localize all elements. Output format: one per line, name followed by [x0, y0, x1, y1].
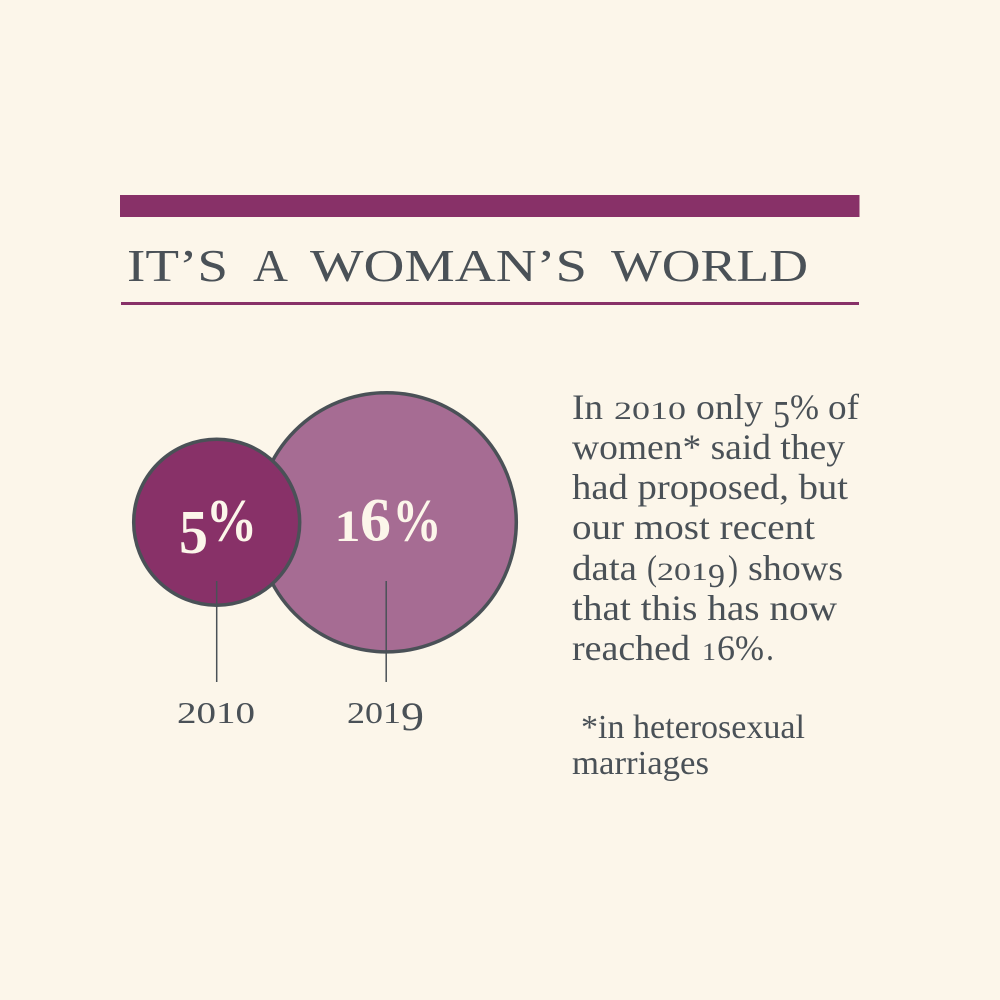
- chart: overlapping circles: [134, 393, 516, 739]
- body text: 9: [708, 558, 725, 595]
- title: IT’S: [127, 240, 228, 291]
- body text: 201: [657, 559, 708, 586]
- label: 2019: 201: [347, 695, 401, 730]
- circle: 2019: 1: [334, 502, 360, 550]
- title: WOMAN’S: [310, 240, 587, 291]
- body text: 6: [717, 628, 735, 668]
- top bar: [120, 195, 860, 217]
- label: 2019: 9: [401, 694, 424, 739]
- body text: 5: [773, 394, 790, 436]
- body text: of: [828, 387, 859, 427]
- label: 2010: 2010: [177, 695, 255, 730]
- body text: In: [572, 387, 603, 427]
- circle: 2019: [257, 393, 516, 682]
- body text: %: [735, 628, 764, 668]
- label: 2019: [347, 694, 424, 739]
- title: A: [253, 240, 288, 291]
- body text: that this has now: [572, 588, 837, 628]
- footnote: [572, 709, 805, 782]
- circle: 2019: 6: [360, 488, 391, 554]
- body text: 2010: [614, 398, 686, 425]
- body text: reached: [572, 628, 690, 668]
- body text: ): [728, 548, 738, 588]
- title underline: [121, 302, 859, 305]
- footnote: marriages: [572, 745, 709, 782]
- footnote: *in heterosexual: [581, 709, 805, 746]
- circle: 2010: [134, 439, 300, 682]
- body text: only: [696, 387, 763, 427]
- circle: 2010: 5: [179, 499, 208, 567]
- circle: 2010: %: [206, 488, 257, 554]
- body text: (: [647, 548, 657, 588]
- body text: %: [790, 387, 819, 427]
- body text: [572, 387, 859, 668]
- circle: 2019: %: [392, 488, 442, 554]
- title: WORLD: [611, 240, 808, 291]
- body text: had proposed, but: [572, 467, 848, 507]
- body text: .: [766, 628, 774, 668]
- title: [127, 240, 808, 291]
- body text: shows: [748, 548, 843, 588]
- body text: 1: [702, 639, 716, 666]
- body text: our most recent: [572, 507, 815, 547]
- body text: data: [572, 548, 637, 588]
- body text: women* said they: [572, 427, 845, 467]
